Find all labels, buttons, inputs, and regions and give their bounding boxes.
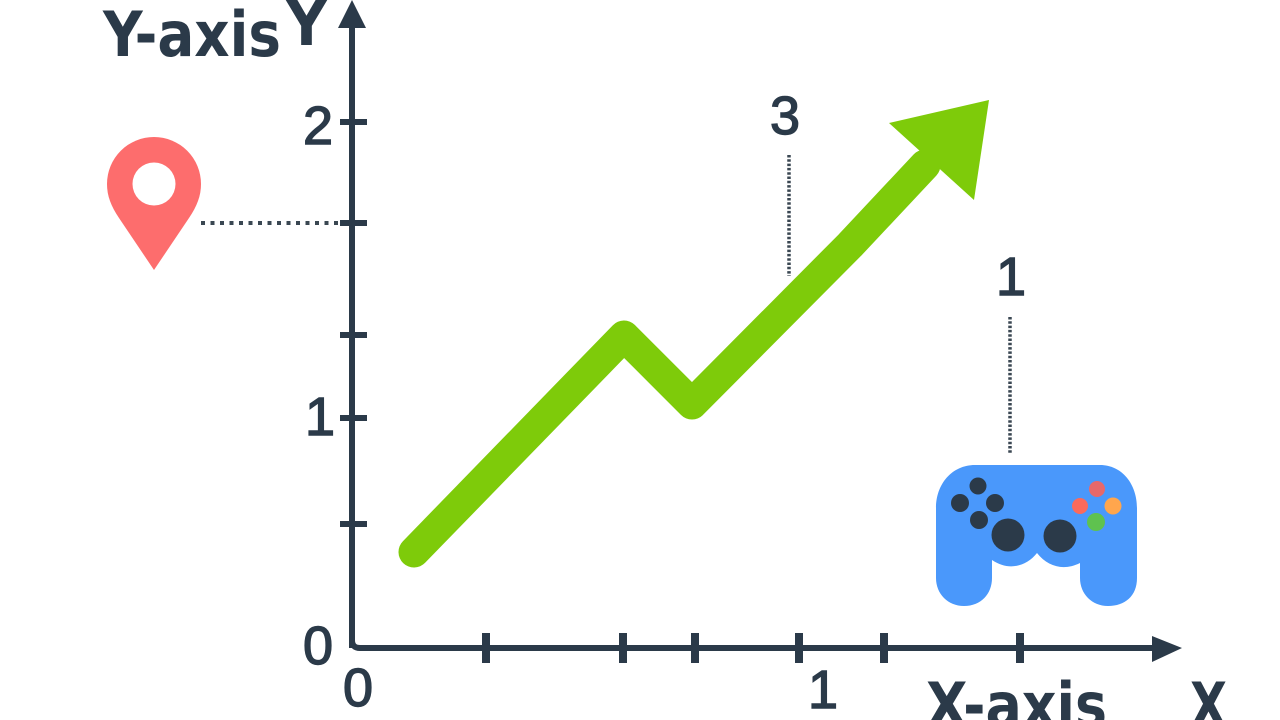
icon: game controller (936, 465, 1137, 606)
y origin label 0: 0 (303, 616, 333, 676)
y tick label 2: 2 (303, 96, 333, 156)
callout line for 3 (787, 155, 791, 276)
x tick label 1: 1 (808, 660, 838, 720)
callout number 3: 3 (770, 86, 800, 146)
icon: map pin (107, 137, 201, 270)
rising green arrow (414, 100, 989, 552)
x origin label 0: 0 (343, 658, 373, 718)
callout line for 1 (1008, 317, 1012, 453)
x axis (352, 633, 1182, 663)
y axis title: Y-axis (102, 0, 281, 71)
callout number 1: 1 (996, 247, 1026, 307)
pin guide line (201, 221, 340, 225)
y tick label 1: 1 (305, 387, 335, 447)
y axis (338, 0, 367, 648)
